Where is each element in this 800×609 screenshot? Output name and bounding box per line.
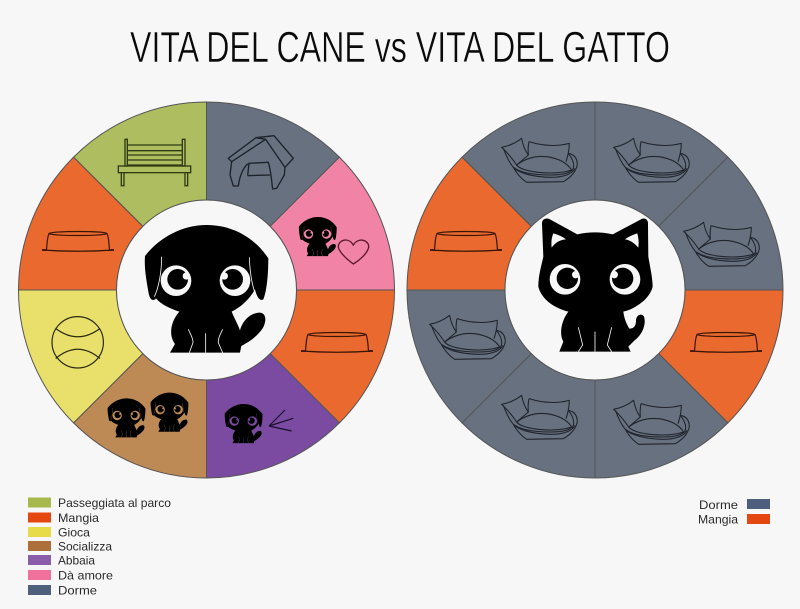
legend label: plays: Gioca — [58, 526, 90, 540]
icon: heart — [338, 240, 369, 264]
sector: sleeps — [206, 102, 339, 226]
legend: cat activities — [698, 498, 770, 526]
legend swatch: sleeps — [28, 585, 51, 595]
legend label: eats: Mangia — [58, 511, 99, 525]
legend swatch: eats — [747, 514, 770, 524]
legend label: socializes: Socializza — [58, 540, 112, 554]
legend label: love: Dà amore — [58, 568, 113, 582]
icon: bowl left — [430, 232, 502, 251]
legend swatch: love — [28, 570, 51, 580]
sector: sleeps — [595, 354, 728, 478]
legend swatch: socializes — [28, 541, 51, 551]
sector: sleeps — [462, 354, 595, 478]
icon: big cat — [538, 218, 653, 352]
panel: dog life wheel — [18, 102, 394, 478]
icon: bed left — [430, 315, 505, 359]
icon: small dog with love — [299, 217, 337, 256]
sector: eats — [18, 157, 143, 290]
icon: bed bottom right — [614, 400, 689, 444]
icon: bark lines — [269, 410, 293, 431]
center disc — [505, 200, 685, 380]
icon: barking dog — [225, 404, 263, 443]
icon: bed upper right — [684, 222, 759, 266]
legend label: barks: Abbaia — [58, 554, 95, 568]
icon: bed top right — [614, 138, 689, 182]
sector: sleeps — [462, 102, 595, 226]
icon: bed top left — [502, 138, 577, 182]
sector: eats — [659, 290, 783, 423]
legend label: sleeps: Dorme — [58, 584, 97, 598]
sector: barks — [206, 354, 339, 478]
sector: eats — [407, 157, 531, 290]
legend swatch: plays — [28, 527, 51, 537]
center disc — [116, 200, 296, 380]
icon: dog house — [228, 136, 293, 189]
icon: big dog — [145, 225, 268, 353]
icon: dog friend two — [151, 393, 188, 432]
legend swatch: park — [28, 498, 51, 508]
icon: bowl right — [301, 332, 373, 352]
panel: cat life wheel — [407, 102, 783, 478]
sector: sleeps — [407, 290, 531, 423]
legend swatch: sleeps — [747, 499, 770, 509]
legend label: eats: Mangia — [698, 512, 738, 526]
legend: dog activities — [28, 496, 171, 598]
legend swatch: barks — [28, 555, 51, 565]
icon: dog friend one — [108, 398, 145, 437]
icon: bowl left — [42, 232, 114, 251]
icon: bench — [118, 139, 191, 186]
legend label: sleeps: Dorme — [699, 498, 738, 512]
sector: eats — [270, 290, 394, 423]
icon: bed bottom left — [502, 395, 577, 439]
sector: socializes — [74, 354, 206, 478]
sector: sleeps — [659, 157, 783, 290]
legend label: park: Passeggiata al parco — [58, 496, 171, 510]
sector: gives love — [270, 157, 394, 290]
icon: bowl right — [690, 332, 762, 352]
sector: plays — [18, 290, 143, 423]
legend swatch: eats — [28, 512, 51, 522]
icon: tennis ball — [52, 317, 103, 368]
sector: sleeps — [595, 102, 728, 226]
sector: park walk — [74, 102, 206, 226]
